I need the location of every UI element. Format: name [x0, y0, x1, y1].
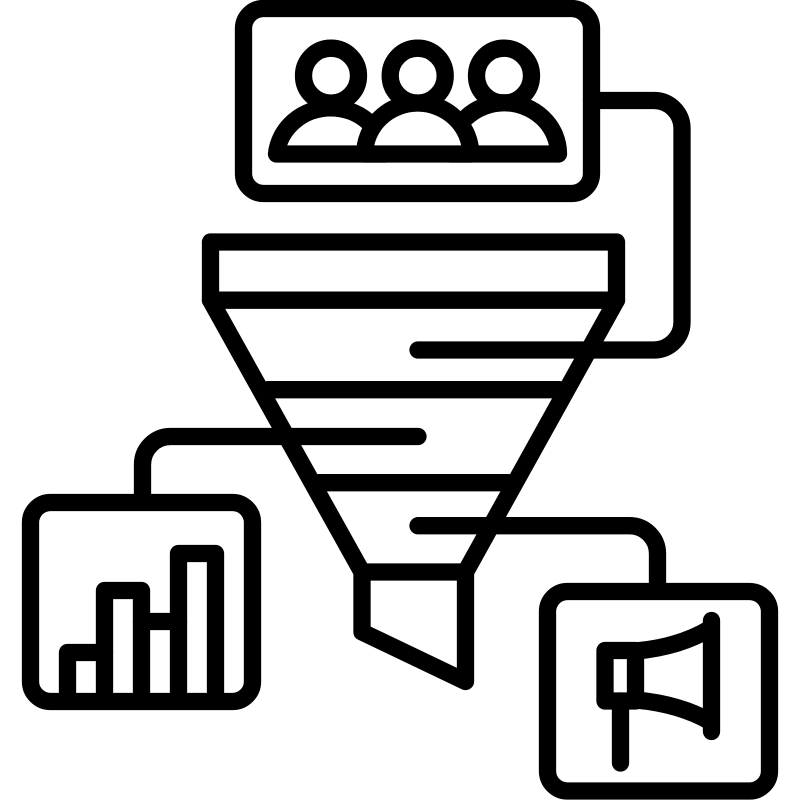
icon: middle person — [365, 48, 471, 154]
arrow: connector from funnel to megaphone box — [418, 526, 658, 591]
funnel body — [210, 300, 616, 572]
icon: left person — [276, 48, 385, 154]
arrow: connector from funnel to chart box — [142, 436, 418, 502]
funnel middle band line — [268, 381, 559, 398]
panel: bar chart box — [30, 502, 252, 702]
icon: group of three people — [276, 48, 558, 154]
chart: funnel — [210, 242, 616, 682]
funnel top band — [210, 242, 616, 300]
funnel spout — [362, 572, 466, 682]
icon: megaphone — [605, 620, 712, 763]
bar chart — [68, 554, 216, 701]
panel: audience box — [244, 8, 592, 194]
panel: megaphone box — [548, 592, 770, 791]
funnel lower band line — [319, 474, 508, 491]
arrow: connector from audience box to funnel — [418, 100, 682, 350]
icon: right person — [450, 48, 558, 154]
